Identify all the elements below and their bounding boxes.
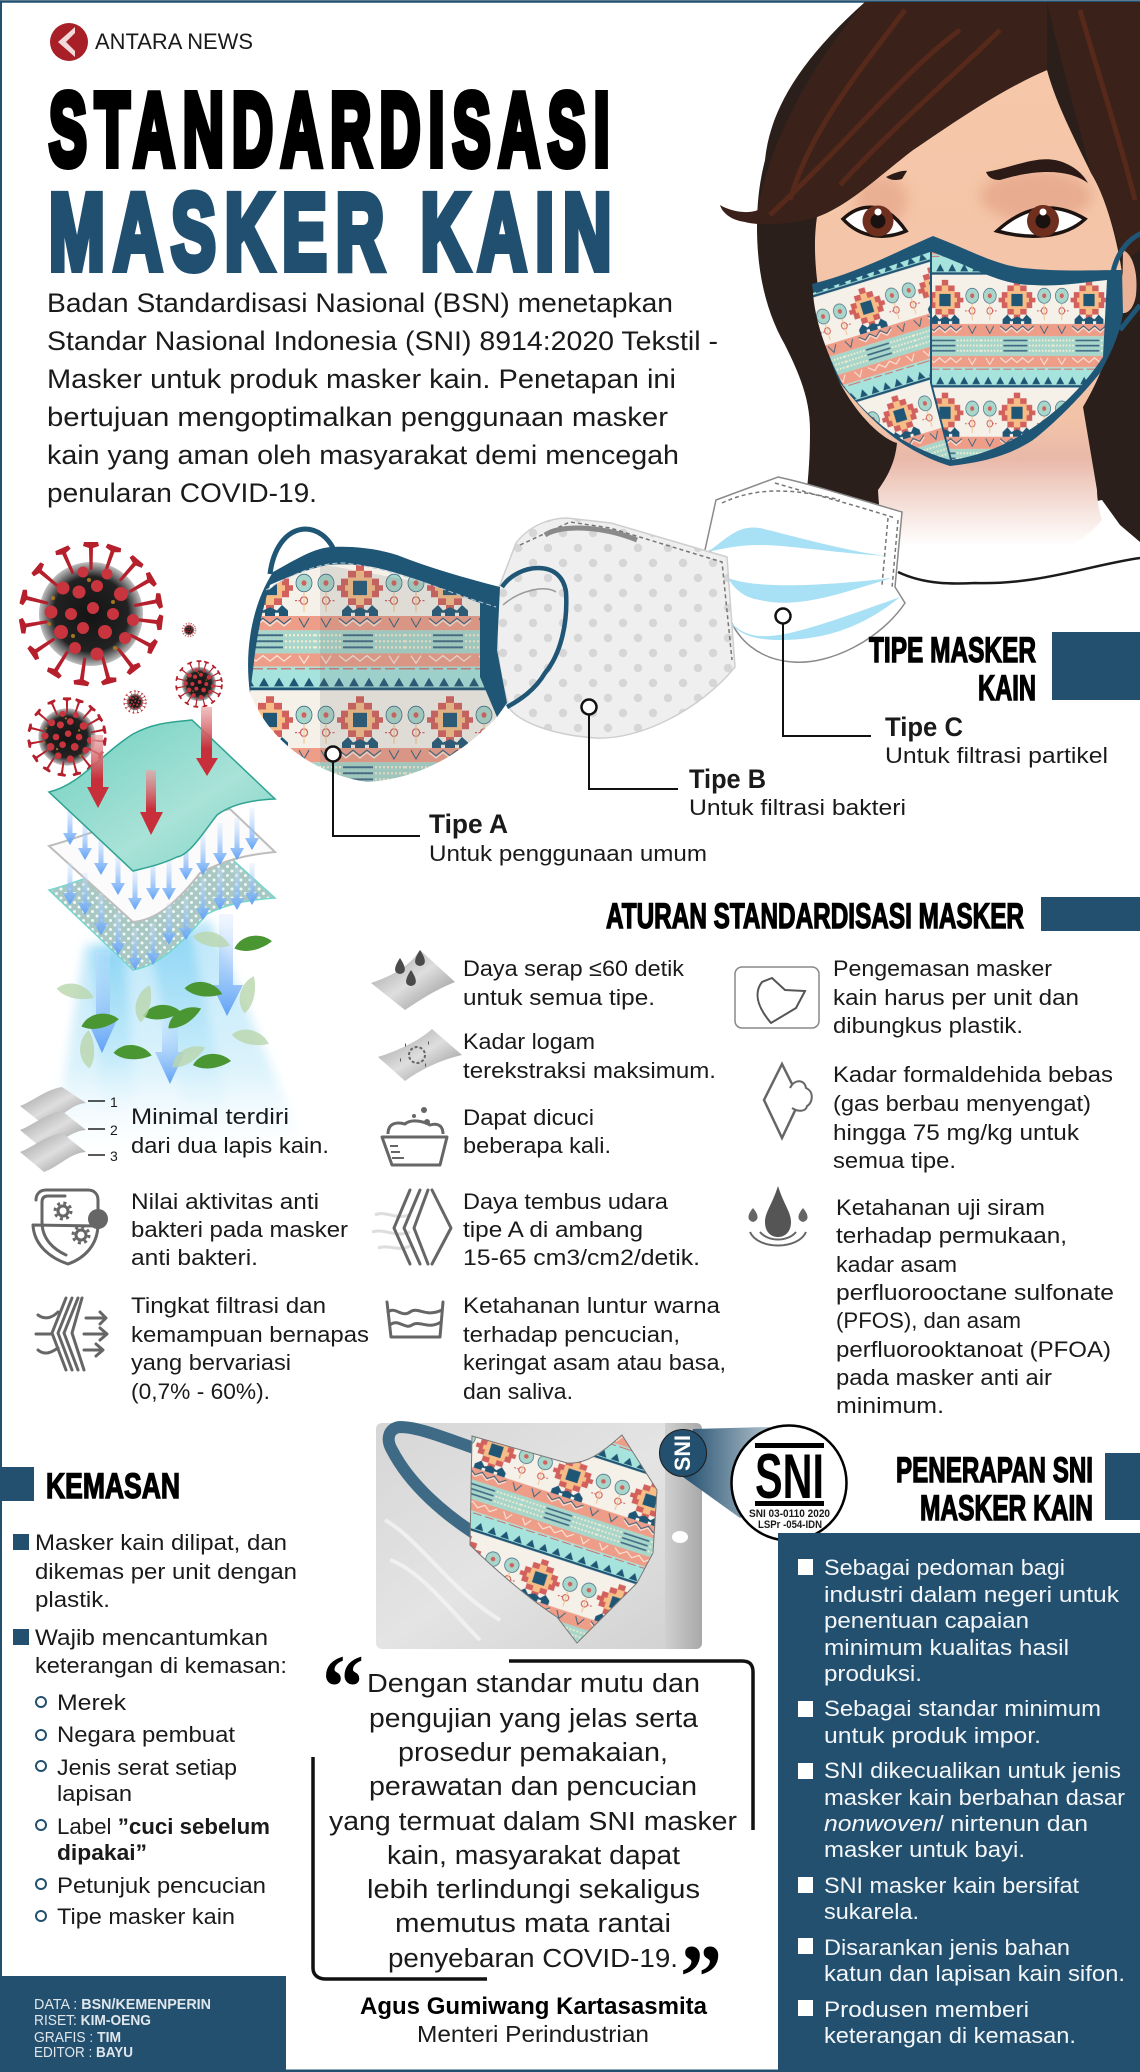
plastic sheen xyxy=(385,1520,500,1640)
callout: Tipe B xyxy=(582,700,906,820)
rule: daya tembus udara xyxy=(372,1189,700,1270)
title line one: STANDARDISASI xyxy=(49,72,618,187)
rule: formaldehida: (gas berbau menyengat) xyxy=(833,1091,1091,1116)
bullet item two: keterangan di kemasan: xyxy=(35,1653,287,1678)
rule: uji siram: Ketahanan uji siram xyxy=(836,1195,1045,1220)
rule: pengemasan: kain harus per unit dan xyxy=(833,985,1079,1010)
rule: pengemasan: dibungkus plastik. xyxy=(833,1013,1023,1038)
rule: daya tembus udara: tipe A di ambang xyxy=(463,1217,643,1242)
cheek shadow right xyxy=(980,170,1092,222)
rule: daya serap xyxy=(371,950,685,1010)
mask panel right xyxy=(932,252,1107,460)
illustration: virus and filter layers xyxy=(19,542,300,1170)
large SNI circle: SNI xyxy=(755,1442,824,1512)
item three: masker untuk bayi. xyxy=(824,1837,1025,1862)
callout: Tipe B: Untuk filtrasi bakteri xyxy=(689,795,906,820)
sub list: Merek xyxy=(57,1690,127,1715)
item three: nonwoven / nirtenun dan xyxy=(824,1811,1088,1836)
logo wordmark: ANTARA NEWS xyxy=(95,29,253,54)
bullet item two xyxy=(13,1625,287,1678)
heading: Penerapan SNI xyxy=(896,1451,1140,1528)
callout: Tipe A xyxy=(326,746,707,866)
quote text: perawatan dan pencucian xyxy=(369,1773,697,1801)
quote author: Agus Gumiwang Kartasasmita xyxy=(360,1993,708,2020)
virus tiny upper xyxy=(182,623,196,637)
icon: washing symbol xyxy=(387,1302,443,1337)
item four xyxy=(798,1873,1080,1924)
item three: SNI dikecualikan untuk jenis xyxy=(824,1758,1121,1783)
opening quote mark: “ xyxy=(322,1636,364,1738)
logo sphere xyxy=(50,23,88,61)
title xyxy=(49,72,620,293)
large SNI circle xyxy=(732,1426,846,1540)
callout: Tipe C: Tipe C xyxy=(885,712,963,742)
bullet item one: dikemas per unit dengan xyxy=(35,1559,297,1584)
item one: Sebagai pedoman bagi xyxy=(824,1555,1065,1580)
heading: Tipe Masker Kain xyxy=(869,631,1140,708)
rule: kadar logam xyxy=(378,1029,716,1083)
hair right strands xyxy=(1047,2,1140,262)
rule: ketahanan luntur warna: Ketahanan luntur warna xyxy=(463,1293,721,1318)
rule: lapisan kain: Minimal terdiri xyxy=(131,1104,289,1129)
right eye xyxy=(997,205,1085,237)
hair bang xyxy=(720,2,1047,224)
stitching xyxy=(266,563,496,607)
sub list: Label ”cuci sebelum xyxy=(57,1814,270,1839)
rule: uji siram xyxy=(748,1186,1114,1418)
rule: ketahanan luntur warna: dan saliva. xyxy=(463,1379,573,1404)
large SNI circle: SNI 03-0110 2020 xyxy=(749,1508,830,1520)
rule: kadar logam: terekstraksi maksimum. xyxy=(463,1058,716,1083)
callout: Tipe B: Tipe B xyxy=(689,764,766,794)
filter layer 2 xyxy=(49,809,275,922)
virus small center xyxy=(130,732,168,770)
ear strap xyxy=(270,529,333,574)
icon: drops on fabric xyxy=(371,950,455,1010)
package strip xyxy=(665,1423,702,1649)
quote xyxy=(313,1636,753,2047)
icon: filter layers xyxy=(36,1298,107,1370)
item one: minimum kualitas hasil xyxy=(824,1635,1069,1660)
rule: uji siram: perfluorooktanoat (PFOA) xyxy=(836,1337,1111,1362)
rule: uji siram: minimum. xyxy=(836,1393,944,1418)
red arrows xyxy=(87,735,109,808)
item six: keterangan di kemasan. xyxy=(824,2023,1076,2048)
virus medium right xyxy=(175,660,223,708)
sub list: lapisan xyxy=(57,1781,132,1806)
item five: katun dan lapisan kain sifon. xyxy=(824,1961,1125,1986)
author role: Menteri Perindustrian xyxy=(417,2021,649,2047)
bullet item one: plastik. xyxy=(35,1587,110,1612)
item one: produksi. xyxy=(824,1661,922,1686)
intro paragraph xyxy=(47,288,718,508)
rule: pengemasan xyxy=(735,956,1079,1038)
item two: Sebagai standar minimum xyxy=(824,1696,1101,1721)
rule: uji siram: pada masker anti air xyxy=(836,1365,1053,1390)
rule: formaldehida xyxy=(764,1062,1113,1173)
icon: wash basin xyxy=(382,1107,447,1165)
rule: lapisan kain xyxy=(20,1087,329,1172)
rule: uji siram: terhadap permukaan, xyxy=(836,1223,1067,1248)
rule: daya tembus udara: 15-65 cm3/cm2/detik. xyxy=(463,1245,700,1270)
quote text: Dengan standar mutu dan xyxy=(367,1670,700,1698)
quote text: penyebaran COVID-19. xyxy=(388,1945,678,1973)
plastic package xyxy=(376,1423,702,1649)
item one: industri dalam negeri untuk xyxy=(824,1582,1120,1607)
panel: credits: EDITOR : BAYU xyxy=(34,2044,133,2061)
small blue arrows xyxy=(63,803,259,970)
icon: layers: 2 xyxy=(110,1122,118,1138)
rule: lapisan kain: dari dua lapis kain. xyxy=(131,1133,329,1158)
icon: metal fabric xyxy=(378,1029,462,1081)
illustration: woman wearing mask xyxy=(720,2,1140,584)
quote text: yang termuat dalam SNI masker xyxy=(329,1808,738,1836)
big blue arrows xyxy=(87,952,117,1053)
rule: dapat dicuci xyxy=(382,1105,611,1165)
ear xyxy=(1122,250,1136,313)
item three xyxy=(798,1758,1126,1862)
small SNI mark: SNI xyxy=(670,1435,695,1471)
item six: Produsen memberi xyxy=(824,1997,1029,2022)
title line two: MASKER KAIN xyxy=(49,173,620,293)
icon: water drop xyxy=(748,1186,808,1246)
bullet item one: Masker kain dilipat, dan xyxy=(35,1530,287,1555)
bullet item two: Wajib mencantumkan xyxy=(35,1625,268,1650)
heading: Tipe Masker Kain: TIPE MASKER xyxy=(869,631,1036,670)
ear strap xyxy=(1113,233,1140,330)
item four: SNI masker kain bersifat xyxy=(824,1873,1080,1898)
magnifier beam xyxy=(683,1427,785,1518)
intro paragraph: Badan Standardisasi Nasional (BSN) menetapkan xyxy=(47,288,673,318)
rule: formaldehida: Kadar formaldehida bebas xyxy=(833,1062,1113,1087)
rule: uji siram: (PFOS), dan asam xyxy=(836,1308,1021,1333)
quote text: prosedur pemakaian, xyxy=(398,1739,668,1767)
quote text: memutus mata rantai xyxy=(395,1910,671,1938)
eyebrows xyxy=(886,159,1088,183)
sub list: Tipe masker kain xyxy=(57,1904,235,1929)
panel: credits: DATA : BSN/KEMENPERIN xyxy=(34,1996,211,2013)
airflow xyxy=(55,920,300,1170)
virus big xyxy=(19,542,163,686)
quote frame xyxy=(313,1661,753,1979)
intro paragraph: Masker untuk produk masker kain. Penetapan ini xyxy=(47,364,676,394)
collar line xyxy=(898,558,1140,584)
filter layer 3 xyxy=(49,860,275,970)
panel: credits: GRAFIS : TIM xyxy=(34,2029,121,2046)
illustration: mask type B xyxy=(496,518,735,738)
mask panel left xyxy=(813,252,950,460)
rule: filtrasi: Tingkat filtrasi dan xyxy=(131,1293,326,1318)
rule: uji siram: kadar asam xyxy=(836,1252,957,1277)
callout: Tipe C xyxy=(776,608,1108,768)
closing quote mark: ” xyxy=(680,1926,722,2028)
hair highlights xyxy=(770,10,1135,215)
quote text: pengujian yang jelas serta xyxy=(369,1705,699,1733)
shade xyxy=(320,564,497,782)
virus tiny xyxy=(123,690,147,714)
icon: layers: 3 xyxy=(110,1148,118,1164)
folded mask xyxy=(470,1435,657,1643)
sub list: Jenis serat setiap xyxy=(57,1755,237,1780)
panel: kemasan list xyxy=(13,1530,297,1929)
quote text: lebih terlindungi sekaligus xyxy=(367,1876,700,1904)
icon: shield xyxy=(33,1190,108,1264)
mask band xyxy=(248,547,507,717)
rule: anti bakteri: bakteri pada masker xyxy=(131,1217,349,1242)
rule: anti bakteri: anti bakteri. xyxy=(131,1245,258,1270)
illustration: packaged mask xyxy=(376,1423,702,1649)
sub list xyxy=(36,1690,270,1929)
item two xyxy=(798,1696,1101,1748)
intro paragraph: kain yang aman oleh masyarakat demi mencegah xyxy=(47,440,679,470)
item five: Disarankan jenis bahan xyxy=(824,1935,1070,1960)
heading: Kemasan xyxy=(0,1467,180,1506)
item three: masker kain berbahan dasar xyxy=(824,1785,1126,1810)
panel: penerapan SNI xyxy=(778,1533,1140,2072)
rule: filtrasi: yang bervariasi xyxy=(131,1350,291,1375)
item four: sukarela. xyxy=(824,1899,919,1924)
rule: ketahanan luntur warna: terhadap pencucian, xyxy=(463,1322,680,1347)
quote text xyxy=(329,1670,738,1973)
rule: daya serap: Daya serap ≤60 detik xyxy=(463,956,685,981)
rule: formaldehida: hingga 75 mg/kg untuk xyxy=(833,1120,1080,1145)
rule: kadar logam: Kadar logam xyxy=(463,1029,595,1054)
icon: gas diamond xyxy=(764,1064,812,1138)
virus medium left xyxy=(27,697,107,777)
rule: anti bakteri: Nilai aktivitas anti xyxy=(131,1189,319,1214)
item one xyxy=(798,1555,1120,1686)
rule: pengemasan: Pengemasan masker xyxy=(833,956,1053,981)
sub list: Negara pembuat xyxy=(57,1722,236,1747)
rule: filtrasi xyxy=(36,1293,369,1404)
rule: filtrasi: (0,7% - 60%). xyxy=(131,1379,270,1404)
left eye xyxy=(843,206,906,236)
bullet item one xyxy=(13,1530,297,1612)
rule: daya serap: untuk semua tipe. xyxy=(463,985,655,1010)
callout: Tipe C: Untuk filtrasi partikel xyxy=(885,743,1108,768)
rule: daya tembus udara: Daya tembus udara xyxy=(463,1189,669,1214)
rule: dapat dicuci: Dapat dicuci xyxy=(463,1105,594,1130)
face and neck xyxy=(815,70,1123,582)
rule: dapat dicuci: beberapa kali. xyxy=(463,1133,611,1158)
large SNI circle: LSPr -054-IDN xyxy=(758,1519,822,1531)
heading: Tipe Masker Kain: KAIN xyxy=(978,669,1036,708)
mask fabric xyxy=(249,560,497,782)
filter layer 1 xyxy=(49,720,275,871)
icon: layers xyxy=(20,1087,118,1172)
sub list: dipakai” xyxy=(57,1840,147,1865)
rule: ketahanan luntur warna: keringat asam atau basa, xyxy=(463,1350,726,1375)
icon: layers: 1 xyxy=(110,1094,118,1110)
item six xyxy=(798,1997,1076,2048)
icon: air through layers xyxy=(372,1190,451,1264)
item one: penentuan capaian xyxy=(824,1608,1029,1633)
item two: untuk produk impor. xyxy=(824,1723,1041,1748)
panel: credits: RISET: KIM-OENG xyxy=(34,2012,151,2029)
quote text: kain, masyarakat dapat xyxy=(387,1842,680,1870)
icon: packaged mask xyxy=(735,967,819,1028)
leaves xyxy=(192,926,232,953)
sub list: Petunjuk pencucian xyxy=(57,1873,266,1898)
rule: ketahanan luntur warna xyxy=(387,1293,726,1404)
callout: Tipe A: Tipe A xyxy=(429,809,508,839)
bottom frame line xyxy=(286,2070,778,2072)
rule: anti bakteri xyxy=(33,1189,349,1270)
callout: Tipe A: Untuk penggunaan umum xyxy=(429,841,707,866)
small SNI mark xyxy=(660,1430,706,1476)
panel: credits xyxy=(0,1976,286,2072)
SNI mark magnifier xyxy=(660,1426,846,1540)
illustration: mask type A xyxy=(248,529,507,782)
item five xyxy=(798,1935,1125,1986)
mask strap xyxy=(389,1427,488,1537)
logo xyxy=(50,23,253,61)
mask outer band xyxy=(812,236,1123,466)
intro paragraph: penularan COVID-19. xyxy=(47,478,317,508)
rule: formaldehida: semua tipe. xyxy=(833,1148,956,1173)
intro paragraph: Standar Nasional Indonesia (SNI) 8914:2020 Tekstil - xyxy=(47,326,718,356)
cheek shadow left xyxy=(856,176,908,224)
hair back xyxy=(757,2,1140,542)
intro paragraph: bertujuan mengoptimalkan penggunaan masker xyxy=(47,402,668,432)
package hole xyxy=(672,1531,688,1543)
rule: filtrasi: kemampuan bernapas xyxy=(131,1322,369,1347)
rule: uji siram: perfluorooctane sulfonate xyxy=(836,1280,1114,1305)
heading: Kemasan: KEMASAN xyxy=(46,1467,180,1506)
illustration: mask type C xyxy=(705,477,905,662)
